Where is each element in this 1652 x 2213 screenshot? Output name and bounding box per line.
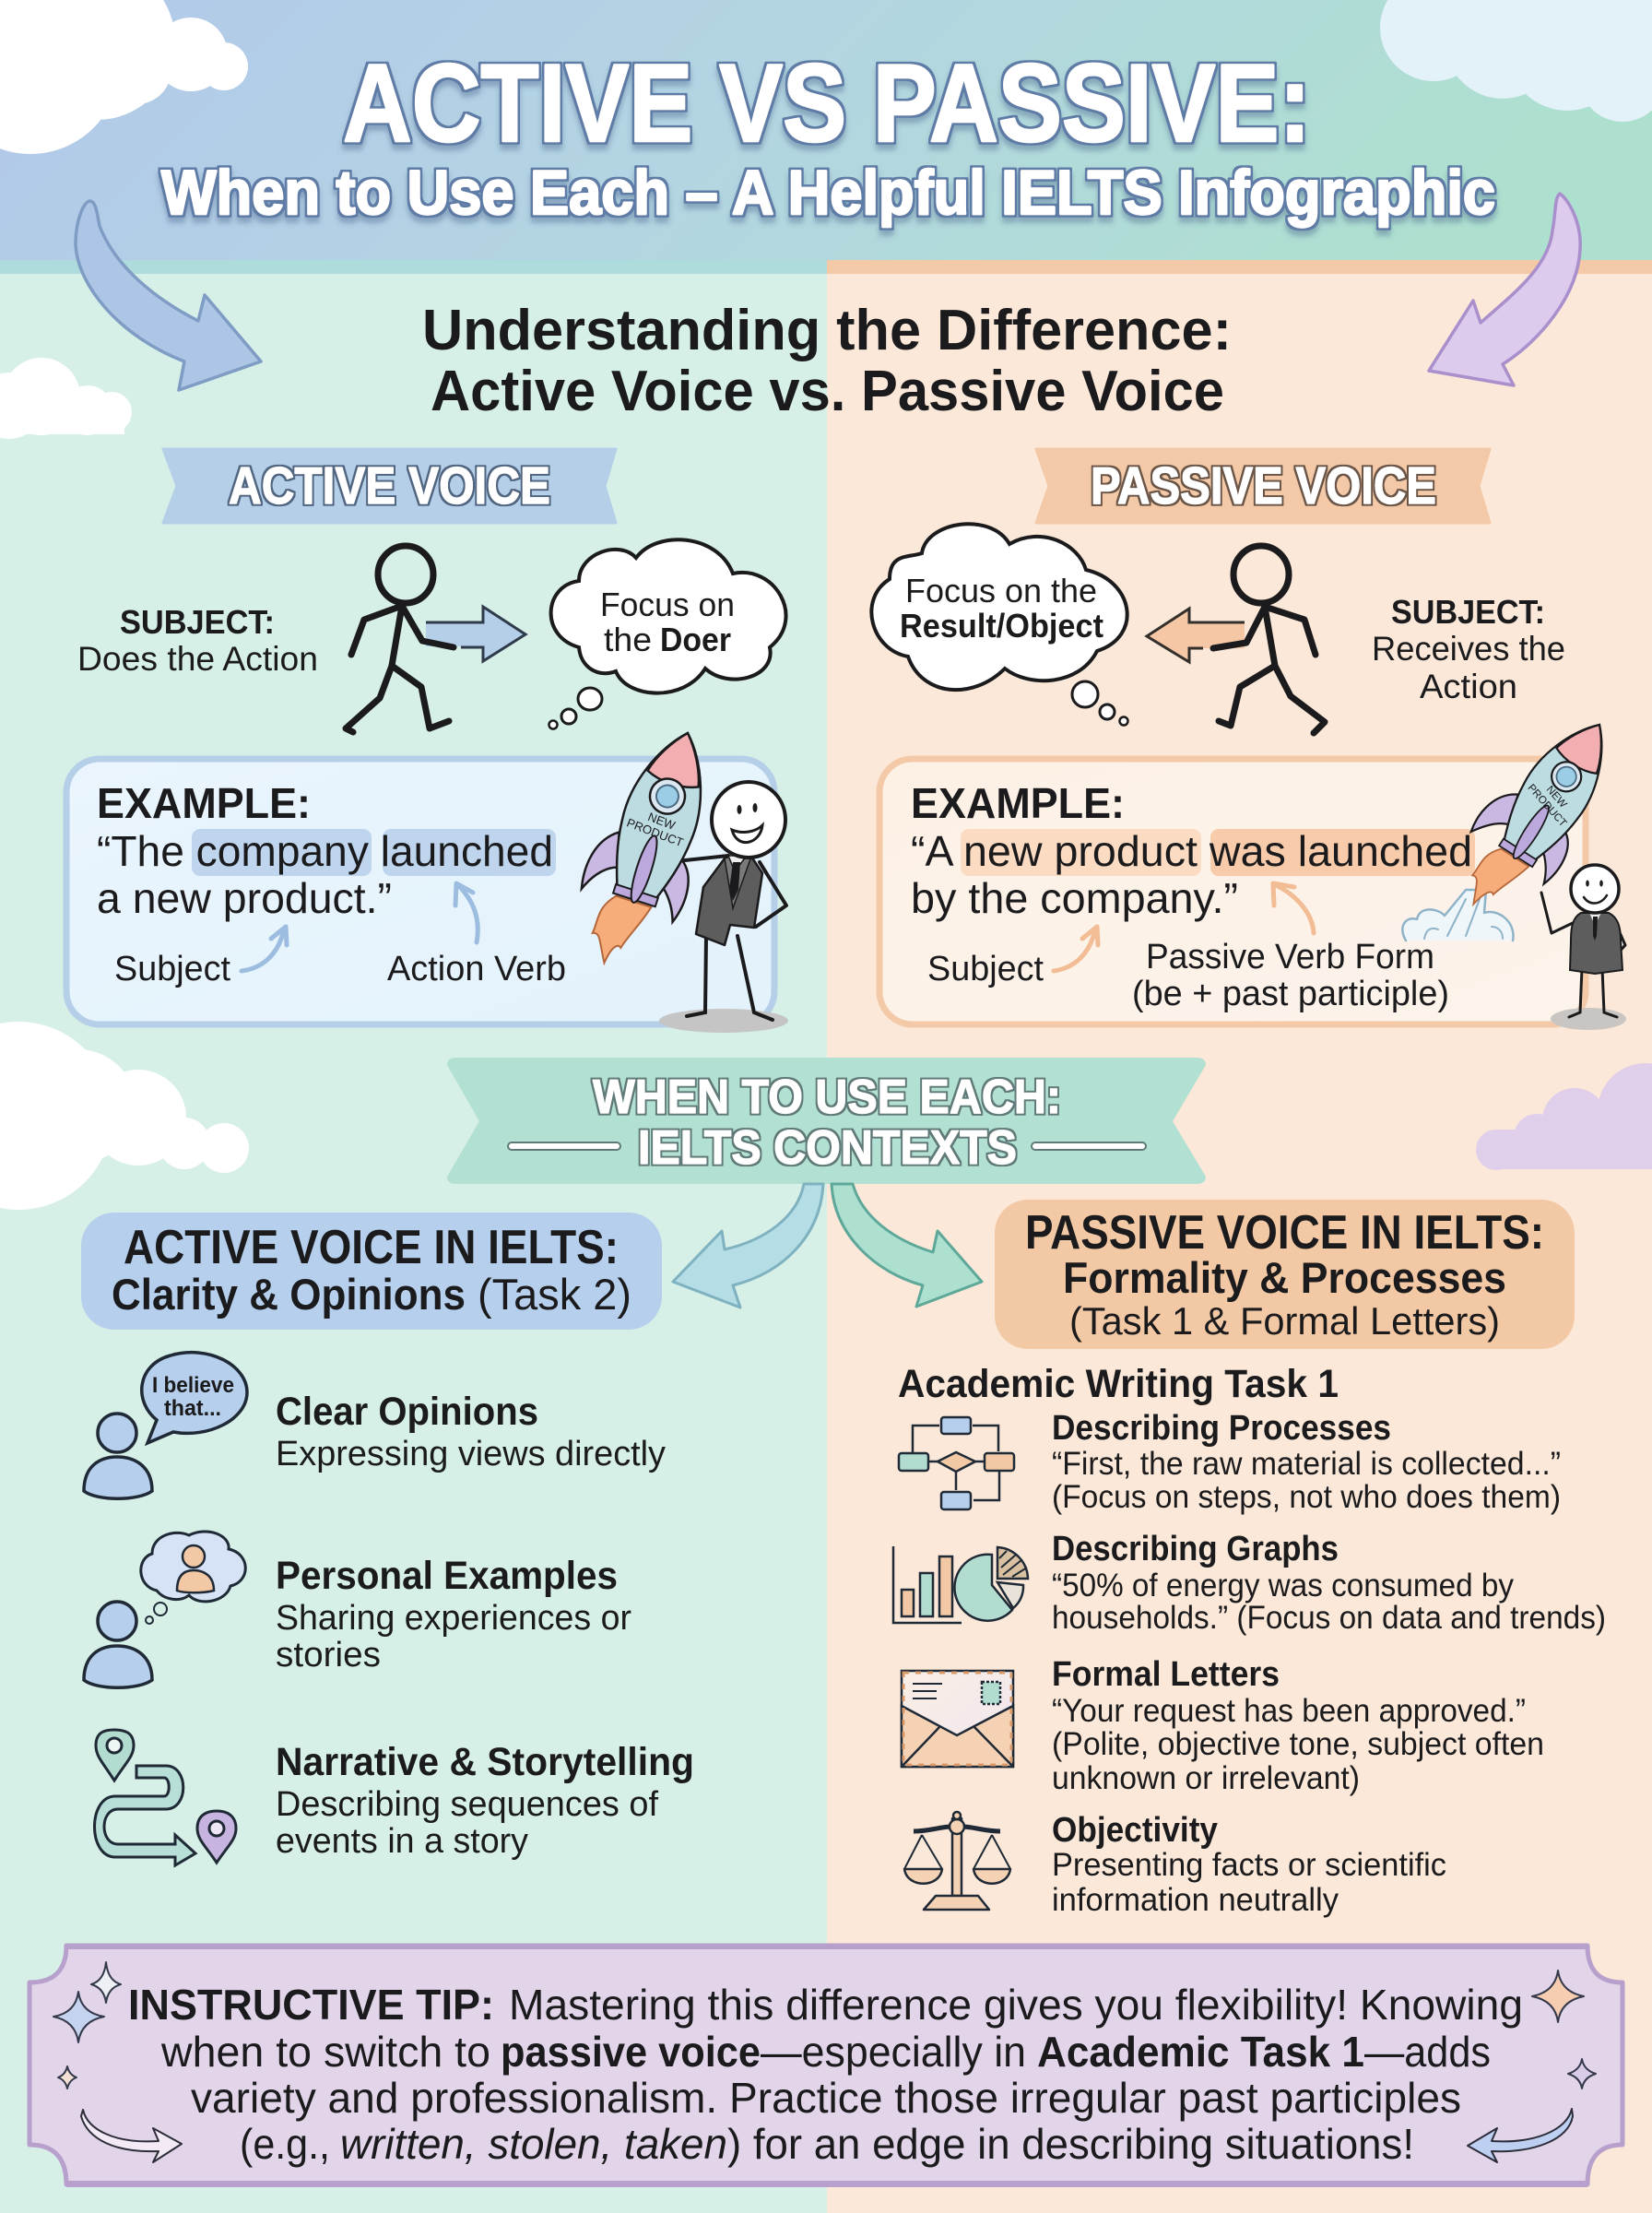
banner: active voice: ACTIVE VOICE [229,456,550,515]
tip text: variety and professionalism. Practice those irregular past participles [191,2074,1461,2122]
subject label active [77,603,318,678]
heading box passive: (Task 1 & Formal Letters) [1069,1299,1500,1343]
heading box active: ACTIVE VOICE IN IELTS: [124,1221,619,1274]
text: formal letters [1052,1655,1544,1796]
thought bubble: focus on the result [871,524,1128,725]
tip text: when to switch to [160,2028,490,2076]
cloud: top left [0,0,248,154]
subject label passive [1372,593,1565,705]
icon: walking stick figure passive [1213,546,1325,733]
text: personal examples: Personal Examples [276,1554,618,1598]
tip text: INSTRUCTIVE TIP: [128,1981,494,2029]
icon: flowchart [899,1417,1014,1509]
text: describing graphs: Describing Graphs [1052,1530,1339,1568]
text: describing graphs: “50% of energy was consumed by [1052,1568,1514,1604]
arrow: to active in IELTS [673,1184,823,1308]
thought bubble: focus on the doer [549,539,786,728]
text: objectivity: information neutrally [1052,1882,1339,1918]
icon: rocket passive [1437,696,1635,932]
banner: when to use each [447,1058,1206,1184]
icon: bar and pie chart [893,1546,1028,1623]
tip text: (e.g., [240,2120,330,2168]
text: describing processes: (Focus on steps, not who does them) [1052,1479,1561,1515]
heading box passive: Formality & Processes [1063,1253,1506,1302]
arrow: passive direction [1147,609,1245,662]
arrow: active direction [426,607,525,661]
icon: rocket active: NEW [646,810,678,833]
icons: sparkles [53,1962,1596,2089]
section heading: Understanding the Difference: [422,299,1232,362]
text: formal letters: unknown or irrelevant) [1052,1760,1360,1796]
subtitle: When to Use Each – A Helpful IELTS Infographic [161,158,1495,228]
text: narrative and storytelling: Narrative & Storytelling [276,1740,694,1784]
text: personal examples: stories [276,1636,381,1675]
example text passive [911,779,1472,1013]
subject label passive: Receives the [1372,630,1565,668]
text: objectivity [1052,1811,1446,1918]
heading box active: Clarity & Opinions [112,1270,466,1319]
text: describing graphs [1052,1530,1606,1636]
tip text: —especially in [761,2028,1026,2076]
panel: passive voice concept [871,524,1565,733]
highlight: launched [383,829,556,876]
example text passive: Passive Verb Form [1146,938,1434,976]
text: describing processes [1052,1409,1561,1515]
icon: businessman passive [1541,865,1626,1030]
example text active: “The company launched [97,827,553,875]
icon: rocket active [560,716,734,980]
cloud: top right [1380,0,1652,122]
heading box passive: PASSIVE VOICE IN IELTS: [1025,1206,1544,1260]
icon: person thought bubble [84,1532,245,1687]
text: objectivity: Objectivity [1052,1811,1218,1850]
tip text: ) for an edge in describing situations! [727,2120,1414,2168]
text: narrative and storytelling: Describing sequences of [276,1785,658,1824]
banner: passive voice: PASSIVE VOICE [1091,456,1436,515]
banner: when to use each: WHEN TO USE EACH: [593,1071,1061,1124]
section heading [422,299,1232,423]
example text active: EXAMPLE: [97,779,311,827]
text: objectivity: Presenting facts or scientific [1052,1847,1446,1883]
panel: active example box [66,716,788,1033]
tip text: Academic Task 1 [1037,2028,1364,2076]
arrows: subject and passive verb pointers [1054,883,1314,971]
arrow: tip lower right [1468,2109,1573,2162]
icon: person speech bubble: I believe [152,1373,234,1398]
text: formal letters: (Polite, objective tone, subject often [1052,1726,1544,1762]
subject label active: SUBJECT: [120,603,275,641]
highlight: company [192,829,372,876]
thought bubble: focus on the doer: the [604,621,652,658]
example text active: Subject [114,950,230,988]
icon: rocket passive: NEW [1544,784,1569,811]
panel: active voice concept [77,539,786,732]
text: narrative and storytelling [276,1740,694,1861]
icon: envelope [902,1671,1013,1767]
text: narrative and storytelling: events in a story [276,1822,528,1861]
panel: instructive tip [30,1944,1622,2187]
thought bubble: focus on the result: Focus on the [905,572,1097,609]
icon: rocket passive: PRODUCT [1525,782,1568,829]
panel: passive example box [879,696,1635,1030]
example text active [97,779,566,988]
text: describing processes: Describing Processes [1052,1409,1391,1448]
example text active: a new product.” [97,874,392,922]
text: describing processes: “First, the raw material is collected...” [1052,1446,1561,1482]
highlight: was launched [1210,829,1475,876]
arrow: purple curved, top right [1429,194,1580,385]
subject label passive: Action [1420,668,1517,705]
cloud: lower left [0,1022,249,1210]
tip text: written, stolen, taken [340,2120,727,2168]
thought bubble: focus on the result: Result/Object [900,607,1103,645]
arrows: subject and action verb pointers [242,883,478,971]
example text active: Action Verb [387,950,566,988]
tip text: passive voice [501,2028,761,2076]
icon: rocket active: PRODUCT [625,815,685,849]
text: formal letters: “Your request has been approved.” [1052,1693,1526,1729]
cloud: lower right lavender [1476,1063,1652,1170]
subheading: academic writing task 1: Academic Writing Task 1 [898,1362,1339,1406]
icon: person speech bubble [84,1353,247,1498]
panel: active voice in IELTS [81,1213,694,1865]
tip text [128,1981,1523,2168]
section heading: Active Voice vs. Passive Voice [431,360,1224,423]
banner: active voice [163,449,616,523]
heading box active [81,1213,662,1330]
example text passive: Subject [927,950,1044,988]
example text passive: (be + past participle) [1132,975,1449,1013]
icon: smoke cloud [1402,890,1514,941]
icon: route with map pins [94,1730,236,1865]
icon: balance scales [904,1812,1010,1910]
text: formal letters: Formal Letters [1052,1655,1280,1694]
tip text: Mastering this difference gives you flexibility! Knowing [509,1981,1523,2029]
arrow: to passive in IELTS [832,1184,982,1307]
tip text: —adds [1364,2028,1491,2076]
banner: when to use each: IELTS CONTEXTS [638,1121,1017,1175]
cloud: middle left [0,358,132,439]
panel: passive voice in IELTS [893,1200,1606,1918]
example text passive: “A new product was launched [911,827,1472,875]
header band [0,0,1652,274]
example text passive: by the company.” [911,874,1238,922]
heading box passive [995,1200,1575,1349]
highlight: new product [961,829,1201,876]
text: personal examples [276,1554,631,1675]
title: ACTIVE VS PASSIVE: [343,41,1311,165]
heading box active: (Task 2) [478,1270,631,1319]
icon: person speech bubble: that... [164,1396,221,1421]
icon: businessman active [659,782,788,1033]
thought bubble: focus on the doer: Focus on [600,586,735,623]
text: personal examples: Sharing experiences or [276,1599,631,1638]
icon: walking stick figure active [346,546,454,732]
text: clear opinions [276,1390,666,1473]
example text passive: EXAMPLE: [911,779,1125,827]
text: clear opinions: Clear Opinions [276,1390,538,1434]
arrow: blue curved, top left [76,201,261,390]
subject label active: Does the Action [77,640,318,678]
subject label passive: SUBJECT: [1391,593,1545,631]
text: describing graphs: households.” (Focus on data and trends) [1052,1600,1606,1636]
thought bubble: focus on the doer: Doer [660,621,731,658]
text: clear opinions: Expressing views directly [276,1435,666,1473]
arrow: tip lower left [81,2110,182,2162]
